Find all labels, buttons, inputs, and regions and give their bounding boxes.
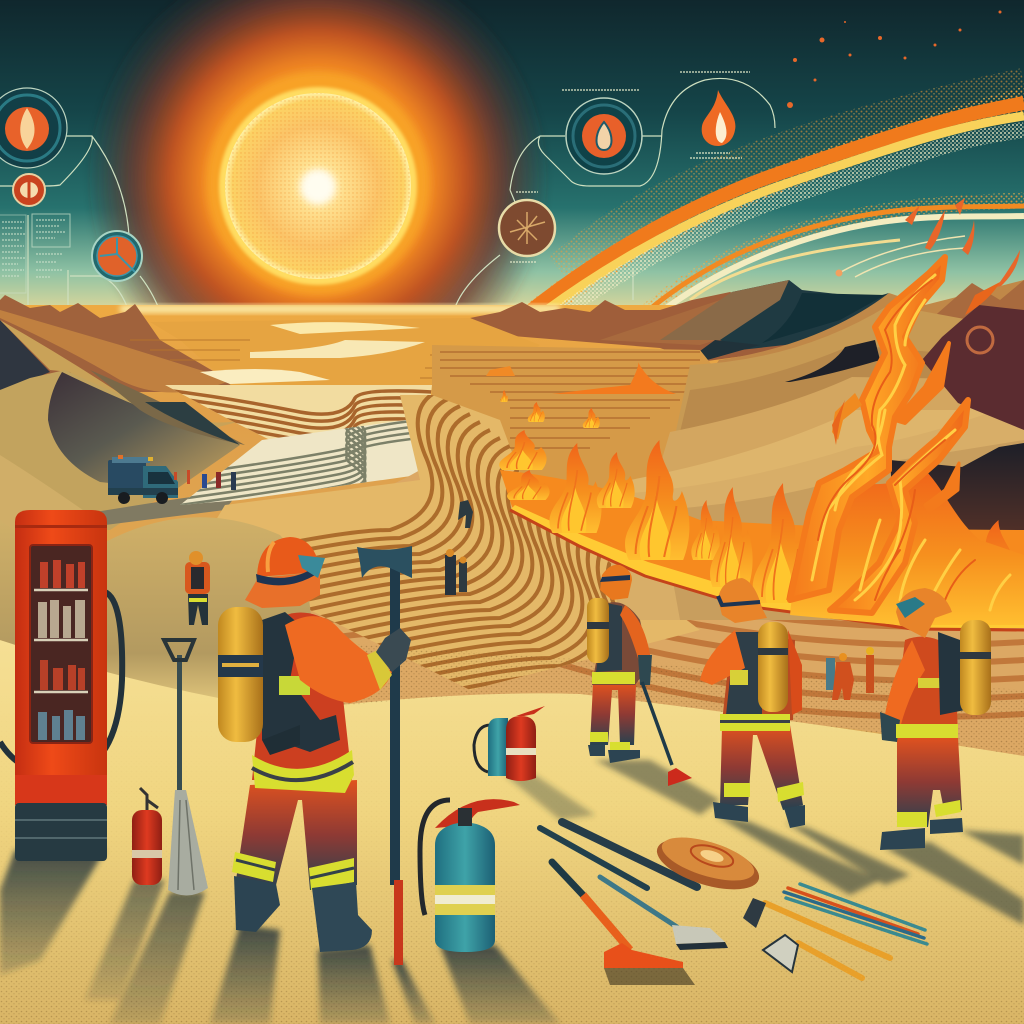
main firefighter with axe xyxy=(218,537,412,965)
flame target badge xyxy=(566,98,642,174)
hand tools xyxy=(540,822,927,985)
boots xyxy=(234,876,280,932)
red hammer-head tool xyxy=(552,862,583,895)
sun xyxy=(206,71,430,295)
brown disc badge xyxy=(499,200,555,256)
distant mountains right xyxy=(470,280,1024,420)
rods xyxy=(784,884,927,944)
axe one xyxy=(765,903,890,958)
ripple field upper xyxy=(165,385,432,439)
distant truck xyxy=(108,455,178,504)
dunes left xyxy=(0,295,260,540)
legs xyxy=(236,780,357,890)
cabinet window xyxy=(30,545,92,743)
bars xyxy=(540,828,647,888)
foreground dune xyxy=(0,517,311,712)
firefighter 4 xyxy=(880,588,991,850)
sky background xyxy=(0,0,1024,320)
lake and central plains xyxy=(130,318,540,420)
helmet xyxy=(245,537,325,608)
air tank xyxy=(218,607,263,742)
small extinguisher xyxy=(132,788,162,885)
firefighter 3 xyxy=(700,578,805,828)
sun glow xyxy=(86,0,550,412)
flying embers xyxy=(836,198,1020,295)
stripes below the fire line xyxy=(250,470,1024,760)
axe two xyxy=(798,943,862,978)
infographic: right diagrams xyxy=(452,72,775,320)
trowel xyxy=(600,877,677,927)
ripple field orange xyxy=(218,395,700,690)
equipment cabinet xyxy=(15,510,107,861)
striped field right with small fires xyxy=(432,345,740,500)
shovel and broom xyxy=(164,640,208,896)
fire arcs xyxy=(432,85,1024,430)
coiled mat xyxy=(651,828,765,900)
fire line xyxy=(499,430,1024,630)
connector lines right xyxy=(452,78,775,320)
chart badge xyxy=(92,231,142,281)
connector lines left xyxy=(0,136,163,320)
small extinguisher pair xyxy=(474,706,545,781)
maroon panel xyxy=(922,305,1024,430)
big flame xyxy=(790,257,1024,625)
ground xyxy=(0,305,1024,1024)
axe xyxy=(357,546,412,965)
ripple field grey xyxy=(180,420,418,505)
infographic: left diagrams xyxy=(0,88,163,320)
large extinguisher xyxy=(420,799,520,952)
fire badge large xyxy=(0,88,67,168)
text panels xyxy=(0,214,70,293)
distant people xyxy=(174,470,473,595)
small flame badge xyxy=(13,174,45,206)
sparks top right xyxy=(787,10,1002,108)
tan dune layers right xyxy=(600,305,1024,620)
hose of cabinet xyxy=(0,592,122,775)
long shadows xyxy=(0,760,1024,1024)
horizon glow xyxy=(120,305,560,313)
firefighter 2 with rake xyxy=(587,565,692,786)
bottom stipple xyxy=(0,871,1024,1024)
small firefighter on dune xyxy=(185,551,210,625)
foreground sand xyxy=(0,640,1024,1024)
torso xyxy=(252,612,352,780)
far firefighters right xyxy=(826,647,874,700)
dark speckled dunes xyxy=(785,340,880,382)
arm xyxy=(285,616,392,703)
stipple band below fire xyxy=(300,640,1024,756)
harness xyxy=(262,612,340,752)
right caption lines xyxy=(510,72,750,262)
flame icon xyxy=(702,90,735,146)
